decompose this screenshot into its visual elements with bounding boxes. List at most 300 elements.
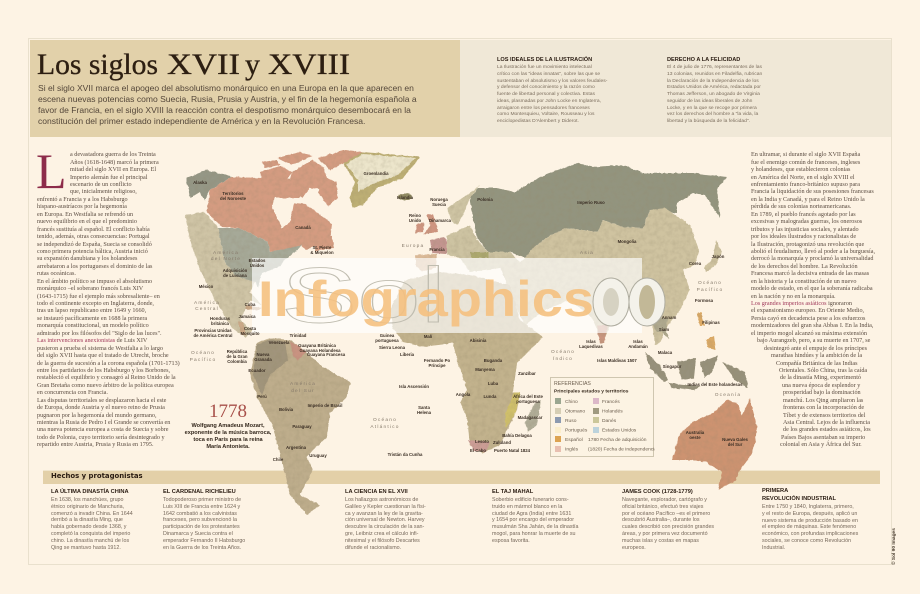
map labels: británica [211,321,230,326]
map labels: Bahía Delagoa [502,433,532,438]
column: La ciencia en el XVII: Galileo y Kepler cuestionan la físi- [345,504,426,510]
text column: left: Las disputas territoriales se desplazaron hacia el este [37,398,166,404]
column: La última dinastía china [51,488,133,551]
map labels: Océano [698,280,722,286]
sidebar: Derecho a la felicidad [667,57,762,124]
region: Canada [207,177,332,252]
text column: left [37,152,180,448]
text column: right: por los ideales ilustrados y racionalistas de [751,234,856,240]
map labels: Unido [409,218,421,223]
map labels: Lunda [484,394,497,399]
column: La última dinastía china: En 1638, los manchúes, grupo [51,497,124,503]
column: El Taj Mahal: y 1654 por encargo del emperador [492,517,574,523]
map labels: América [194,300,220,306]
region: Crimea olive patch [470,252,488,258]
text column: left: en concurrencia con Francia. [37,390,108,396]
legend: Francés [602,399,620,405]
text column: right: derrocó la monarquía y proclamó la universalidad [751,256,873,262]
text column: left: entre los partidarios de los Habsburgo y los Borbones, [37,368,170,374]
map labels: Príncipe [429,363,446,368]
map labels: Islas Maldivas 1507 [597,358,637,363]
map labels: Islas [586,339,596,344]
text column: left: pugnaron por la hegemonía del mundo germano, [37,413,157,419]
panel: top sidebars background [460,40,891,137]
map labels: Malaca [658,350,673,355]
text column: right: marathas hindúes y la ambición de la [771,353,862,359]
title: XVII [167,48,240,81]
column: La última dinastía china: comenzó a invadir China. En 1644 [51,511,133,517]
region: South America [250,338,350,515]
intro text [38,82,417,126]
text column: right: En 1789, el pueblo francés agotado por las [751,212,856,218]
callout: 1778 [184,401,271,450]
map labels: Manyema [475,367,495,372]
text column: left: restableció el equilibrio y consagró al Reino Unido de la [37,375,176,381]
text column: right: una nueva época de esplendor y [782,383,860,389]
text column: left: Las intervenciones anexionistas de Luis XIV [37,338,147,344]
text column: left: enfrentó a Francia y a los Habsburgo [37,197,128,203]
map labels: Reino [409,213,421,218]
region: Iceland [398,194,412,200]
text column: right: Tíbet y de extensos territorios del [783,413,865,419]
text column: left: (1643-1715) fue el ejemplo más sobresaliente– en [37,294,160,300]
text column: right: el imperio mogol alcanzó su máxima extensión [751,331,867,337]
map labels: Europa [402,243,424,249]
map labels: Nueva [257,352,270,357]
text column: right: Francia la liquidación de sus posesiones francesas [751,189,874,195]
map labels: Colombia [227,359,247,364]
watermark veil [252,258,642,333]
map labels: Mongolia [618,239,637,244]
map labels: Oceanía [715,392,741,398]
credit: © Sol 90 Images [892,528,897,565]
region: United States [218,228,303,288]
map labels: Buganda [484,358,503,363]
map labels: Santa [418,405,430,410]
column: James Cook: Navegante, explorador, cartógrafo y [622,497,707,503]
map labels: Islas [633,339,643,344]
map labels: Argentina [286,445,307,450]
text column: left: todo de Polonia, cuyo territorio sería desintegrado y [37,435,165,441]
text column: left: Imperio alemán fue el principal [70,175,147,181]
map labels: Abisinia [470,338,487,343]
region: Madagascar [525,400,541,432]
column: La última dinastía china: Qing se mantuvo hasta 1912. [51,545,121,551]
map labels: Unidos [250,263,265,268]
map labels: Guinea [380,333,395,338]
map labels: Tristán da Cunha [388,452,423,457]
intro text: constitución del primer estado independiente de América y en la Revolución Francesa. [38,116,365,126]
sidebar: Derecho a la felicidad: DERECHO A LA FELICIDAD [667,57,740,63]
map labels: Océano [373,417,397,423]
legend: Otomano [565,408,585,414]
region: Alaska [186,170,232,200]
map labels: Venezuela [269,340,290,345]
column: El cardenal Richelieu: Luis XIII de Francia entre 1624 y [163,504,240,510]
column: El cardenal Richelieu: EL CARDENAL RICHELIEU [163,489,236,495]
column: James Cook: por el océano Pacífico –es el primero [622,511,710,517]
map labels: Índico [553,355,573,362]
text column: left: nuevo equilibrio en el que el predominio [37,219,137,225]
text column: right: manchú. Los Qing ampliaron las [783,398,863,404]
text column: left: escenario de un conflicto [70,182,132,188]
map labels: Zanzíbar [518,371,536,376]
sidebar: Los ideales de la Ilustración: La Ilustración fue un movimiento intelectual [497,65,592,70]
map labels: oeste [689,435,701,440]
text column: right: Asia Central. Lejos de la influencia [783,420,870,426]
map labels: Islandia [397,195,414,200]
map labels: Lesoto [475,439,489,444]
legend: Estados Unidos [602,428,637,434]
text column: right: Persia cayó en decadencia pese a los esfuerzos [751,316,865,322]
region: Central Europe [447,225,520,272]
map labels: Costa [244,326,257,331]
map labels: portuguesa [375,338,399,343]
region: Caribbean and Central America [238,305,262,335]
text column: left: pusieron a prueba el sistema de Westfalia a lo largo [37,346,163,352]
column: Primera Revolución Industrial: sociales, se conoce como Revolución [762,538,851,544]
text column: left: mitad del siglo XVII en Europa. El [70,167,156,173]
map labels: Noruega [430,197,448,202]
column: James Cook: descubrió Australia–, durante los [622,517,700,523]
column: El Taj Mahal: EL TAJ MAHAL [492,489,533,495]
region: France [430,237,449,254]
title: Los siglos [37,48,158,81]
region: British Isles [415,214,438,234]
map labels: Madagascar [518,415,543,420]
map labels: Asia [580,250,594,256]
sidebar: Los ideales de la Ilustración: crítico con las "ideas innatas", sobre las que se [497,72,600,77]
map labels: Mosquito [240,331,260,336]
text column: right: en América del Norte, en el siglo XVIII el [751,175,854,181]
region: Australia [672,398,757,490]
sidebar: Los ideales de la Ilustración [497,56,608,124]
column: James Cook: cuales describió con precisión grandes [622,524,714,530]
map labels: Dinamarca [429,218,452,223]
column: El Taj Mahal: truido en mármol blanco en la [492,504,562,510]
legend: Español [565,437,583,443]
map labels: Paraguay [292,424,312,429]
column: James Cook [622,489,714,551]
map labels: del Noroeste [220,196,247,201]
panel: title banner [30,40,460,137]
map labels: Fernando Po [424,358,451,363]
map labels: Océano [191,350,215,356]
legend: Chino [565,399,578,405]
column: El cardenal Richelieu: en la Guerra de los Treinta Años. [163,545,241,551]
column: La última dinastía china: completó la conquista del imperio [51,531,130,537]
column: La última dinastía china: chino. La dinastía manchú de los [51,538,129,544]
column: Primera Revolución Industrial: económico, con profundas implicaciones [762,531,858,537]
text column: right: colonial en Asia y África del Sur. [780,442,862,448]
text column: left: de Europa, donde Austria y el nuevo reino de Prusia [37,405,165,411]
map labels: Canadá [295,225,311,230]
column: El cardenal Richelieu: emperador Fernando II Habsburgo [163,538,245,544]
region: Spain [415,254,437,271]
column: El Taj Mahal: Soberbio edificio funerario cons- [492,497,569,503]
text column: right [751,152,875,448]
sidebar: Los ideales de la Ilustración: y defensor del conocimiento y la razón como [497,85,595,90]
text column: left: todo el continente excepto en Inglaterra, donde, [37,301,154,307]
region: Japan [704,240,722,272]
intro text: escena nuevas potencias como Suecia, Rusia, Prusia y Austria, y el fin de la hegemonía española a [38,94,417,104]
sidebar: Los ideales de la Ilustración: como Montesquieu, Voltaire, Rousseau y los [497,112,594,117]
column: El cardenal Richelieu: participación de los protestantes [163,524,240,530]
map labels: Puerto Natal 1824 [494,448,531,453]
column: El Taj Mahal: ciudad de Agra (India) entre 1631 [492,511,571,517]
column: La ciencia en el XVII: ca y avanzan la ley de la gravita- [345,511,423,517]
column: El cardenal Richelieu: Todopoderoso primer ministro de [163,497,241,503]
text column: right: Países Bajos asentaban su imperio [781,435,865,441]
map labels: Guayana Francesa [307,352,346,357]
region: Southern Africa tip [468,440,490,452]
map labels: Territorios [222,191,244,196]
sidebar: Los ideales de la Ilustración: arraigaron entre los pensadores franceses [497,106,590,110]
map labels: Alaska [193,180,208,185]
text column: right: la Ilustración, protagonizó una revolución que [751,242,864,248]
region: Guianas [290,341,306,360]
text column: left: su expansión danubiana y los holandeses [37,256,137,262]
drop cap: L [36,143,67,199]
map labels: Angola [456,392,471,397]
map labels: Andamán [628,344,648,349]
column: La ciencia en el XVII [345,489,426,551]
text column: right: bajo Aurangzeb, pero, a su muerte en 1707, se [757,338,870,344]
sidebar: Los ideales de la Ilustración: enciclopedistas D'Alembert y Diderot. [497,119,579,124]
region: Greenland interior [346,154,416,192]
map labels: Guayana Británica [298,343,336,348]
sidebar: Derecho a la felicidad: Estados Unidos de América, redactada por [667,85,761,90]
callout: 1778: María Antonieta. [206,444,250,450]
map labels: St. Pierre [313,245,332,250]
map labels: Luba [488,381,499,386]
column: Primera Revolución Industrial: nuevo sistema de producción basado en [762,518,858,524]
map labels: Groenlandia [363,171,389,176]
sidebar: Derecho a la felicidad: libertad y la búsqueda de la felicidad". [667,119,750,124]
map labels: América [290,381,316,387]
map labels: Océano [551,349,575,355]
column: La ciencia en el XVII: gre, Leibniz crea el cálculo infi- [345,531,418,537]
legend: Inglés [565,446,579,452]
text column: right: enfrentamiento franco-británico supuso para [751,182,860,188]
sidebar: Los ideales de la Ilustración: LOS IDEALES DE LA ILUSTRACIÓN [497,57,592,63]
sidebar: Derecho a la felicidad: El 4 de julio de 1776, representantes de las [667,65,762,70]
column: Primera Revolución Industrial: REVOLUCIÓN INDUSTRIAL [762,496,836,502]
map labels: Corea [689,261,702,266]
text column: right: de los grandes estados asiáticos, los [783,427,871,433]
map labels: Imperio de Brasil [308,403,342,408]
map labels: Annam [662,315,676,320]
text column: left: monárquico –el soberano francés Luis XIV [37,286,143,292]
map labels: El Cabo [470,448,486,453]
sidebar: Los ideales de la Ilustración: sustentaban el absolutismo y los valores feudales- [497,78,607,84]
column: El cardenal Richelieu: Dinamarca y Suecia contra el [163,531,233,537]
region: Dutch East Indies [645,352,748,390]
text column: left: monarquía constitucional, un modelo político [37,323,149,329]
text column: right: excesivas y malogradas guerras, los onerosos [751,219,862,225]
column: La última dinastía china: había gobernado desde 1368, y [51,524,126,530]
column: El cardenal Richelieu: franceses, pero subvencionó la [163,517,237,523]
column: Primera Revolución Industrial: el empleo de máquinas. Este fenómeno [762,524,856,530]
map labels: México [199,284,214,289]
legend [550,377,655,457]
map labels: Francia [429,247,445,252]
map labels: Uruguay [309,453,327,458]
region: Mexico [185,212,262,338]
map labels: Indias del Este holandesas [688,382,743,387]
region: Mozambique [505,392,520,428]
column: La ciencia en el XVII: LA CIENCIA EN EL XVII [345,489,408,495]
sidebar: Derecho a la felicidad: 13 colonias, reunidos en Filadelfia, rubrican [667,72,762,77]
legend: Portugués [565,428,588,434]
text column: left: hispano-austríacos por la hegemonía [37,204,127,210]
legend: Danés [602,418,617,424]
region: Asia [500,208,699,345]
column: El Taj Mahal: musulmán Sha Jahán, de la dinastía [492,524,578,530]
text column: right: en la India y Canadá, y para el Reino Unido la [751,197,865,203]
column: La última dinastía china: LA ÚLTIMA DINASTÍA CHINA [51,489,129,495]
text column: right: y holandeses, que establecieron colonias [751,167,850,173]
text column: left: mientras la Rusia de Pedro I el Grande se convertía en [37,420,170,426]
legend: REFERENCIAS [554,381,591,387]
text column: left: a devastadora guerra de los Treinta [70,152,156,158]
column: La ciencia en el XVII: descubre la circulación de la san- [345,524,424,530]
text column: left: se independizó de España, Suecia se consolidó [37,242,152,248]
text column: left: del siglo XVII hasta que el tratado de Utrecht, broche [37,353,169,359]
text column: left: se instauró pacíficamente en 1688 la primera [37,316,147,322]
legend: 1780 Fecha de adquisición [588,437,647,443]
map labels: Imperio Ruso [577,200,605,205]
text column: left: en Europa. En Westfalia se refrendó un [37,212,133,218]
watermark: Sol 90: Sol [281,251,446,339]
text column: left: tras un lapso republicano entre 1649 y 1660, [37,308,146,314]
text column: right: en la historia y la constitución de un nuevo [751,279,856,285]
sidebar: Derecho a la felicidad: Thomas Jefferson, un abogado de Virginia [667,92,760,97]
column: La última dinastía china: étnico originario de Manchuria, [51,504,124,510]
region: Philippines [697,312,716,350]
map labels: Sierra Leona [379,345,406,350]
callout: 1778: Wolfgang Amadeus Mozart, [191,423,265,429]
map labels: Formosa [695,298,714,303]
map labels: del Sur [291,388,315,394]
region: Greenland [343,152,420,208]
text column: right: Los grandes imperios asiáticos ignoraron [751,301,852,307]
intro text: Si el siglo XVII marca el apogeo del absolutismo monárquico en una Europa en la que aparecen en [38,82,414,92]
text column: right: tributos y las injusticias sociales, y alentado [751,227,859,233]
column: La última dinastía china: derribó a la dinastía Ming, que [51,517,123,523]
text column: right: Compañía Británica de las Indias [776,361,858,367]
map labels: Pacífico [697,287,723,293]
column: Primera Revolución Industrial [762,488,858,551]
map labels: Malí [424,334,433,339]
legend: Ruso [565,418,577,424]
column: James Cook: JAMES COOK (1728-1779) [622,489,693,495]
text column: right: En ultramar, si durante el siglo XVII España [751,152,860,158]
column: James Cook: oficial británico, efectuó tres viajes [622,504,703,510]
map labels: Suecia [432,202,447,207]
map labels: Isla Ascensión [399,384,429,389]
text column: left: como primera potencia báltica, Austria inició [37,249,148,255]
map labels: Chile [273,457,284,462]
map labels: Jamaica [239,314,256,319]
map labels: Singapur [663,364,682,369]
map labels: de la Gran [226,354,248,359]
map labels: Atlántico [370,424,400,430]
column: El Taj Mahal: mogol, para honrar la muerte de su [492,531,575,537]
map labels: del Norte [211,256,241,262]
column: Primera Revolución Industrial: y el resto de Europa, después, aplicó un [762,511,857,517]
region: Russian Empire [470,163,727,258]
text column: right: pérdida de sus colonias norteamericanas. [751,204,851,210]
callout: 1778: exponente de la música barroca, [185,430,271,436]
title [37,48,350,81]
text column: right: abolió el feudalismo, llevó al poder a la burguesía, [751,249,875,255]
text column: left: arrebataron a los portugueses el dominio de las [37,264,152,270]
column: El Taj Mahal: esposa favorita. [492,538,530,544]
map labels: portuguesa [516,399,540,404]
band heading: Hechos y protagonistas [51,472,143,480]
region: Africa [390,272,543,453]
watermark: Sol 90 [281,251,665,339]
map labels: Granada [254,357,272,362]
sidebar: Los ideales de la Ilustración: fuente de libertad personal y colectiva. Estas [497,92,595,97]
column: Primera Revolución Industrial: Entre 1750 y 1840, Inglaterra, primero, [762,504,854,510]
intro text: favor de Francia, en el siglo XVIII la reacción contra el despotismo monárquico desembocará en la [38,104,411,114]
text column: left: una nueva potencia europea a costa de Suecia y sobre [37,427,168,433]
column: La ciencia en el XVII: difunde el racionalismo. [345,545,401,551]
map labels: Honduras [210,316,231,321]
text column: left: repartido entre Austria, Prusia y Rusia en 1795. [37,442,153,448]
map labels: Polonia [477,197,493,202]
region: Southeast Asia [650,318,670,340]
column: Primera Revolución Industrial: Industrial. [762,545,785,551]
column: La ciencia en el XVII: ción universal de Newton. Harvey [345,517,425,523]
map labels: Bolivia [279,407,294,412]
text column: left: francés sustituía al español. El conflicto había [37,227,150,233]
column: James Cook: áreas, y por primera vez documentó [622,531,708,537]
text column: right: prosperidad bajo la dominación [783,390,861,396]
text column: left: En el ámbito político se impuso el absolutismo [37,279,152,285]
text column: right: de los derechos del hombre. La Revolución [751,264,858,270]
map labels: Australia [686,430,705,435]
column: Primera Revolución Industrial: PRIMERA [762,488,788,494]
text column: right: desintegró ante el empuje de los príncipes [764,346,867,352]
map labels: Provincias Unidas [194,328,232,333]
map labels: Zululand [493,440,511,445]
column: El cardenal Richelieu [163,489,245,551]
watermark: Infographics: Infographics [258,271,594,327]
map labels: Laquedivas [579,344,603,349]
text column: left: tenido, además, otras consecuencias: Portugal [37,234,150,240]
sidebar: Derecho a la felicidad: vez los derechos del hombre a "la vida, la [667,112,758,117]
column: La ciencia en el XVII: nitesimal y el filósofo Descartes [345,538,420,544]
text column: right: en la nación y no en la monarquía. [751,294,836,300]
region: Scandinavia [447,185,480,225]
map labels: & Miquelon [310,250,334,255]
map labels: Nueva Gales [722,437,749,442]
map labels: Guayana Holandesa [299,348,341,353]
region: Amazon north [253,339,288,395]
map labels: Ecuador [248,368,266,373]
text column: right: fue el enemigo común de franceses, ingleses [751,160,860,166]
map labels: Siam [659,327,669,332]
sidebar: Derecho a la felicidad: la Declaración de la Independencia de los [667,78,759,84]
callout: 1778: 1778 [209,401,247,422]
legend: Principales estados y territorios [554,388,629,394]
map labels: República [227,349,248,354]
column: James Cook: muchas islas y costas en mapas [622,538,699,544]
band: hechos y protagonistas [43,470,880,484]
